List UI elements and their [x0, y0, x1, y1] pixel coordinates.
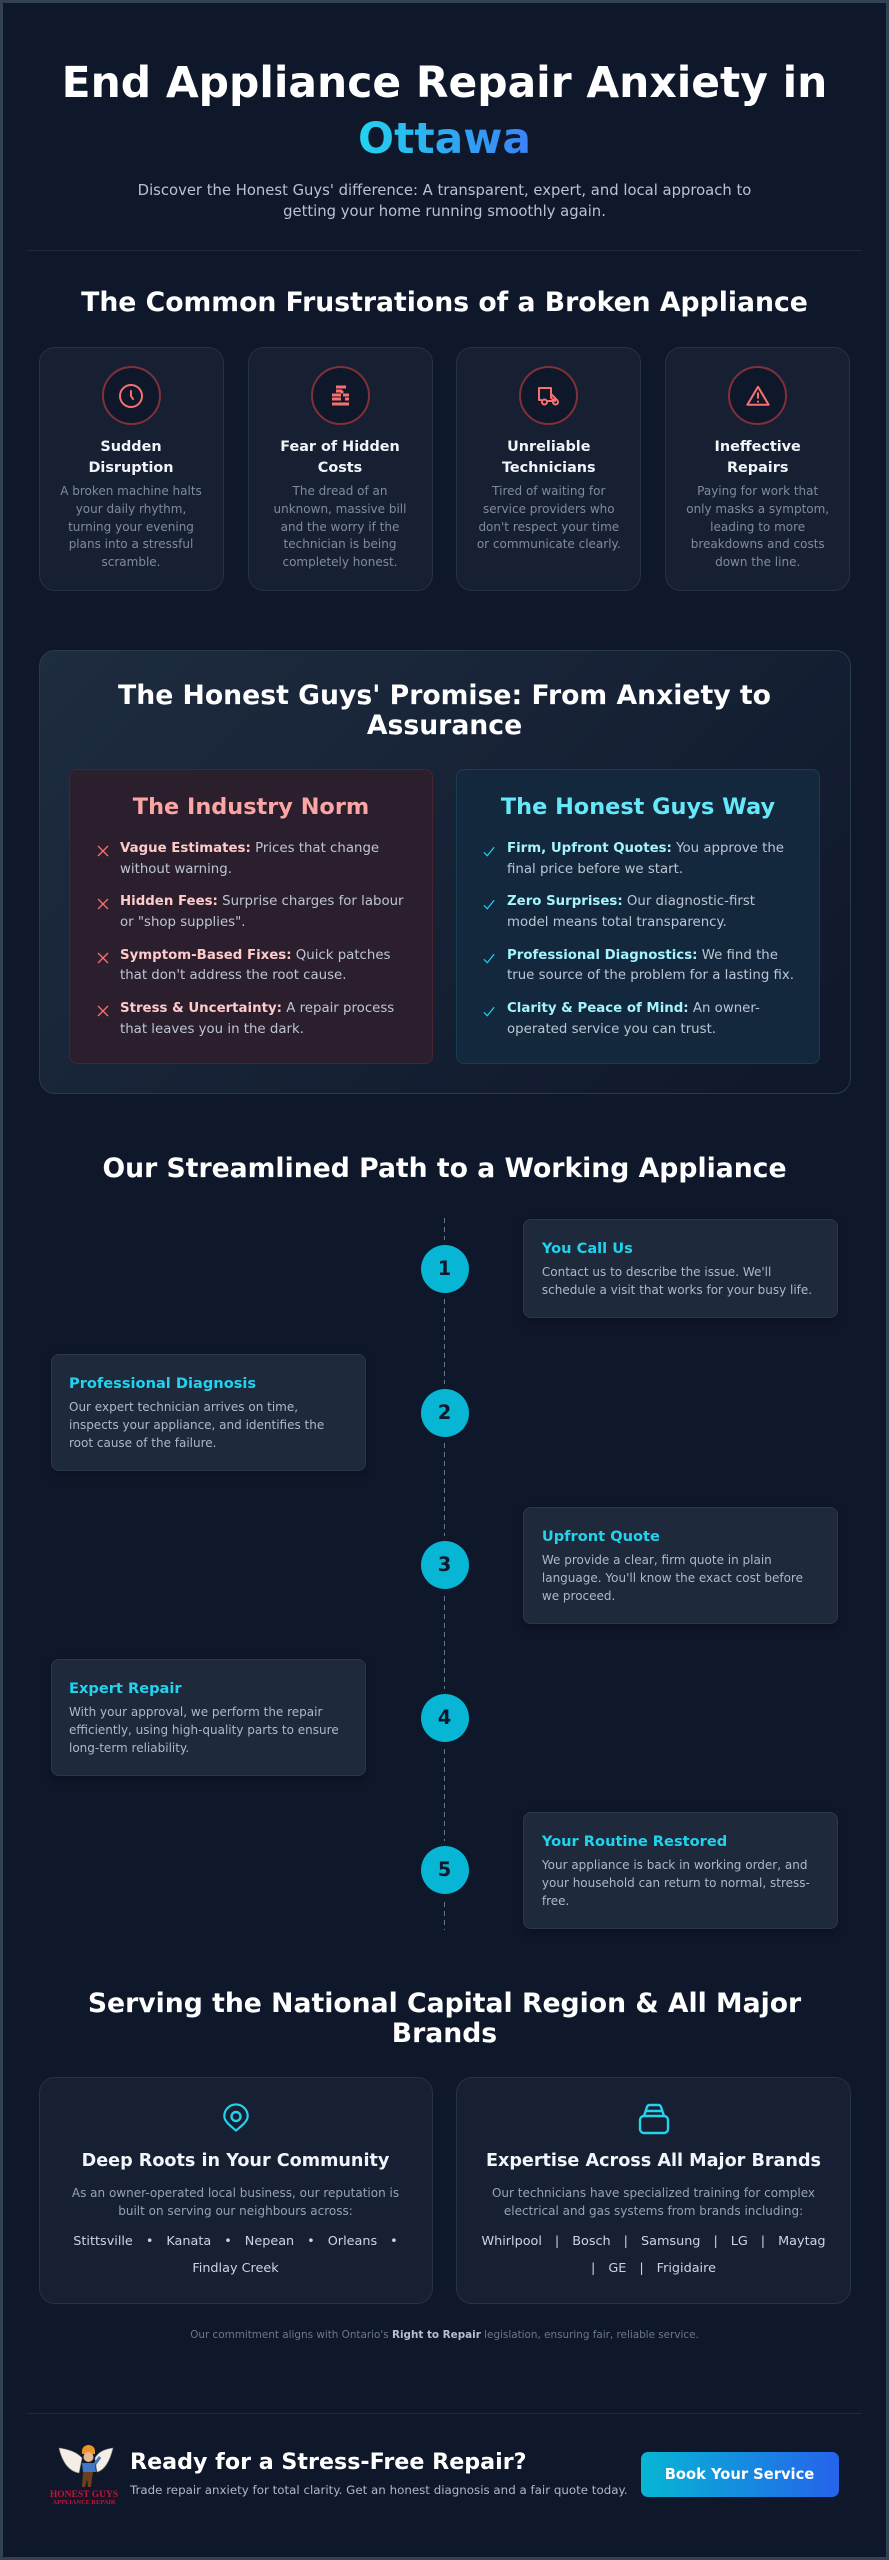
subtitle — [138, 182, 751, 220]
card title — [715, 439, 801, 476]
brand list: Whirlpool | Bosch | Samsung | LG | Maytag — [481, 2234, 826, 2249]
step 4 card — [50, 1659, 366, 1776]
brand list: | GE | Frigidaire — [591, 2261, 716, 2276]
heading: serving: Brands — [392, 2018, 497, 2049]
list item: stress — [120, 1001, 394, 1037]
list item: diagnostics: Professional Diagnostics: We find the — [507, 948, 778, 962]
card text: built on serving our neighbours across: — [118, 2204, 353, 2218]
list item: diagnostics — [507, 948, 794, 983]
column heading: The Industry Norm — [133, 794, 369, 820]
logo: honest guys: APPLIANCE REPAIR — [53, 2499, 116, 2506]
step text: root cause of the failure. — [69, 1436, 216, 1450]
icon: check — [484, 900, 494, 910]
card title: Fear of Hidden — [280, 439, 400, 455]
card text: completely honest. — [282, 555, 398, 569]
card text: only masks a symptom, — [686, 502, 829, 516]
card title: Expertise Across All Major Brands — [486, 2151, 821, 2171]
step text: Your appliance is back in working order, and — [542, 1858, 807, 1872]
card text: and the worry if the — [281, 520, 399, 534]
icon: truck — [519, 366, 578, 425]
step title: Expert Repair — [69, 1680, 182, 1697]
heading: serving — [88, 1988, 802, 2049]
logo: honest guys — [50, 2443, 118, 2507]
step text — [542, 1858, 810, 1908]
list item: clarity: Clarity & Peace of Mind: An owner- — [507, 1001, 760, 1016]
card text: Our technicians have specialized training for complex — [492, 2186, 815, 2200]
card title: Repairs — [727, 460, 788, 476]
card text: electrical and gas systems from brands including: — [504, 2204, 803, 2218]
list item: stress: that leaves you in the dark. — [120, 1022, 304, 1037]
step text: long-term reliability. — [69, 1741, 189, 1755]
list item: zero surprises: model means total transparency. — [507, 915, 727, 930]
timeline line — [444, 1218, 445, 1930]
step title: Your Routine Restored — [542, 1833, 727, 1850]
step text: schedule a visit that works for your busy life. — [542, 1283, 812, 1297]
subtitle: Discover the Honest Guys' difference: A transparent, expert, and local approach to — [138, 182, 751, 199]
step text: With your approval, we perform the repair — [69, 1705, 322, 1719]
step text: we proceed. — [542, 1589, 615, 1603]
step text: efficiently, using high-quality parts to ensure — [69, 1723, 339, 1737]
card text: down the line. — [715, 555, 800, 569]
list item: symptom fixes: Symptom-Based Fixes: Quick patches — [120, 948, 390, 962]
list item: hidden fees — [120, 894, 404, 930]
panel: honest guys way — [456, 769, 820, 1064]
button: book your service — [640, 2452, 838, 2497]
heading: process: Our Streamlined Path to a Working Appliance — [102, 1153, 787, 1184]
heading: promise — [118, 680, 771, 741]
step 5 card — [523, 1812, 838, 1929]
call to action text: Trade repair anxiety for total clarity. Get an honest diagnosis and a fair quote today. — [130, 2483, 628, 2497]
card text: technician is being — [284, 537, 396, 551]
card text — [274, 484, 406, 569]
list item: symptom fixes: that don't address the root cause. — [120, 968, 346, 983]
column heading: The Honest Guys Way — [501, 794, 775, 820]
step text: inspects your appliance, and identifies the — [69, 1418, 324, 1432]
list item: clarity — [507, 1001, 760, 1037]
icon: cross — [98, 898, 108, 910]
step text: We provide a clear, firm quote in plain — [542, 1553, 772, 1567]
step text — [69, 1400, 324, 1450]
list item: hidden fees: or "shop supplies". — [120, 915, 245, 930]
card text — [686, 484, 829, 569]
card text: or communicate clearly. — [477, 537, 621, 551]
card text — [72, 2186, 399, 2218]
card text: unknown, massive bill — [274, 502, 406, 516]
panel: brands — [456, 2077, 851, 2304]
card text: As an owner-operated local business, our reputation is — [72, 2186, 399, 2200]
panel: frustration card 3 — [456, 347, 641, 591]
card text: turning your evening — [68, 520, 194, 534]
header — [62, 58, 827, 220]
card title: Unreliable — [507, 439, 590, 455]
step text — [69, 1705, 339, 1755]
icon: cross — [98, 952, 108, 964]
step 3 number — [420, 1541, 468, 1589]
icon: check — [484, 846, 494, 857]
icon: cross — [98, 846, 108, 856]
step 1 number — [420, 1245, 468, 1293]
step title: Professional Diagnosis — [69, 1375, 256, 1392]
list item: diagnostics: true source of the problem for a lasting fix. — [507, 968, 794, 983]
step 2 number — [420, 1388, 468, 1436]
step 3 card — [523, 1507, 838, 1624]
heading: serving: Serving the National Capital Region & All Major — [88, 1988, 801, 2019]
panel: community — [38, 2077, 432, 2304]
list item: vague estimates: Vague Estimates: Prices that change — [120, 841, 379, 856]
card text: Tired of waiting for — [492, 484, 605, 498]
card title: Deep Roots in Your Community — [82, 2151, 389, 2171]
card text: service providers who — [483, 502, 615, 516]
step title: Upfront Quote — [542, 1528, 660, 1545]
list item: firm quotes: Firm, Upfront Quotes: You approve the — [507, 841, 784, 856]
card title: Ineffective — [715, 439, 801, 455]
step 2 card — [50, 1354, 366, 1471]
panel: promise — [38, 650, 850, 1094]
step 4 number — [420, 1694, 468, 1742]
list item: stress: Stress & Uncertainty: A repair process — [120, 1001, 394, 1016]
step text — [542, 1265, 812, 1297]
card text: Paying for work that — [697, 484, 818, 498]
call to action heading: Ready for a Stress-Free Repair? — [130, 2449, 527, 2475]
heading: common frustrations: The Common Frustrations of a Broken Appliance — [81, 287, 808, 318]
card title — [280, 439, 400, 476]
card text: leading to more — [710, 520, 805, 534]
panel: frustration card 2 — [248, 347, 432, 591]
button: book your service: Book Your Service — [665, 2466, 814, 2483]
card text — [492, 2186, 815, 2218]
footnote: Our commitment aligns with Ontario's Right to Repair legislation, ensuring fair, reliable service. — [190, 2329, 699, 2341]
step 5 number — [420, 1846, 468, 1894]
card title: Costs — [318, 460, 362, 476]
heading: promise: The Honest Guys' Promise: From Anxiety to — [118, 680, 771, 711]
logo: honest guys: HONEST GUYS — [50, 2490, 118, 2500]
title: Ottawa — [358, 114, 531, 163]
subtitle: getting your home running smoothly again. — [283, 203, 606, 220]
title — [62, 58, 827, 163]
panel: industry norm — [69, 769, 433, 1064]
card text: don't respect your time — [478, 520, 619, 534]
list item: zero surprises — [507, 894, 755, 930]
icon: map pin — [223, 2103, 249, 2132]
card text: plans into a stressful — [69, 537, 193, 551]
card text: The dread of an — [293, 484, 387, 498]
list item: firm quotes: final price before we start. — [507, 862, 683, 877]
icon: appliance stack — [638, 2104, 670, 2134]
title: End Appliance Repair Anxiety in — [62, 58, 827, 107]
card text — [477, 484, 621, 551]
list item: zero surprises: Zero Surprises: Our diagnostic-first — [507, 894, 755, 909]
card text — [60, 484, 202, 569]
heading: promise: Assurance — [367, 710, 522, 741]
card text: your daily rhythm, — [76, 502, 186, 516]
service areas: Stittsville • Kanata • Nepean • Orleans • — [73, 2234, 398, 2249]
step text: free. — [542, 1894, 569, 1908]
card text: scramble. — [102, 555, 160, 569]
step text: Contact us to describe the issue. We'll — [542, 1265, 771, 1279]
card title: Disruption — [88, 460, 174, 476]
step 1 number: 1 — [438, 1257, 451, 1280]
list item: hidden fees: Hidden Fees: Surprise charges for labour — [120, 894, 404, 909]
icon: warning triangle — [728, 366, 787, 425]
service areas: Findlay Creek — [192, 2261, 279, 2276]
icon: stack of bills — [310, 366, 370, 425]
list item: clarity: operated service you can trust. — [507, 1022, 716, 1037]
icon: check — [484, 954, 494, 964]
panel: frustration card 1 — [38, 347, 224, 591]
panel: frustration card 4 — [665, 347, 850, 591]
step 2 number: 2 — [438, 1400, 451, 1424]
list item: vague estimates: without warning. — [120, 862, 232, 877]
service areas — [73, 2234, 398, 2276]
card title: Technicians — [502, 460, 596, 476]
step 1 card — [523, 1219, 838, 1318]
step 4 number: 4 — [438, 1706, 451, 1728]
card text: breakdowns and costs — [691, 537, 825, 551]
step text — [542, 1553, 803, 1603]
card text: A broken machine halts — [60, 484, 202, 498]
step text: language. You'll know the exact cost before — [542, 1571, 803, 1585]
step 3 number: 3 — [438, 1553, 451, 1576]
card title: Sudden — [100, 439, 162, 455]
list item: symptom fixes — [120, 948, 390, 983]
icon: clock — [102, 366, 160, 425]
icon: check — [484, 1006, 494, 1017]
card title — [88, 439, 174, 476]
step text: your household can return to normal, stress- — [542, 1876, 810, 1890]
step title: You Call Us — [542, 1240, 633, 1257]
step text: Our expert technician arrives on time, — [69, 1400, 298, 1414]
step 5 number: 5 — [438, 1858, 451, 1881]
list item: firm quotes — [507, 841, 784, 877]
list item: vague estimates — [120, 841, 379, 877]
brand list — [481, 2234, 826, 2276]
icon: cross — [98, 1006, 108, 1016]
card title — [502, 439, 596, 476]
